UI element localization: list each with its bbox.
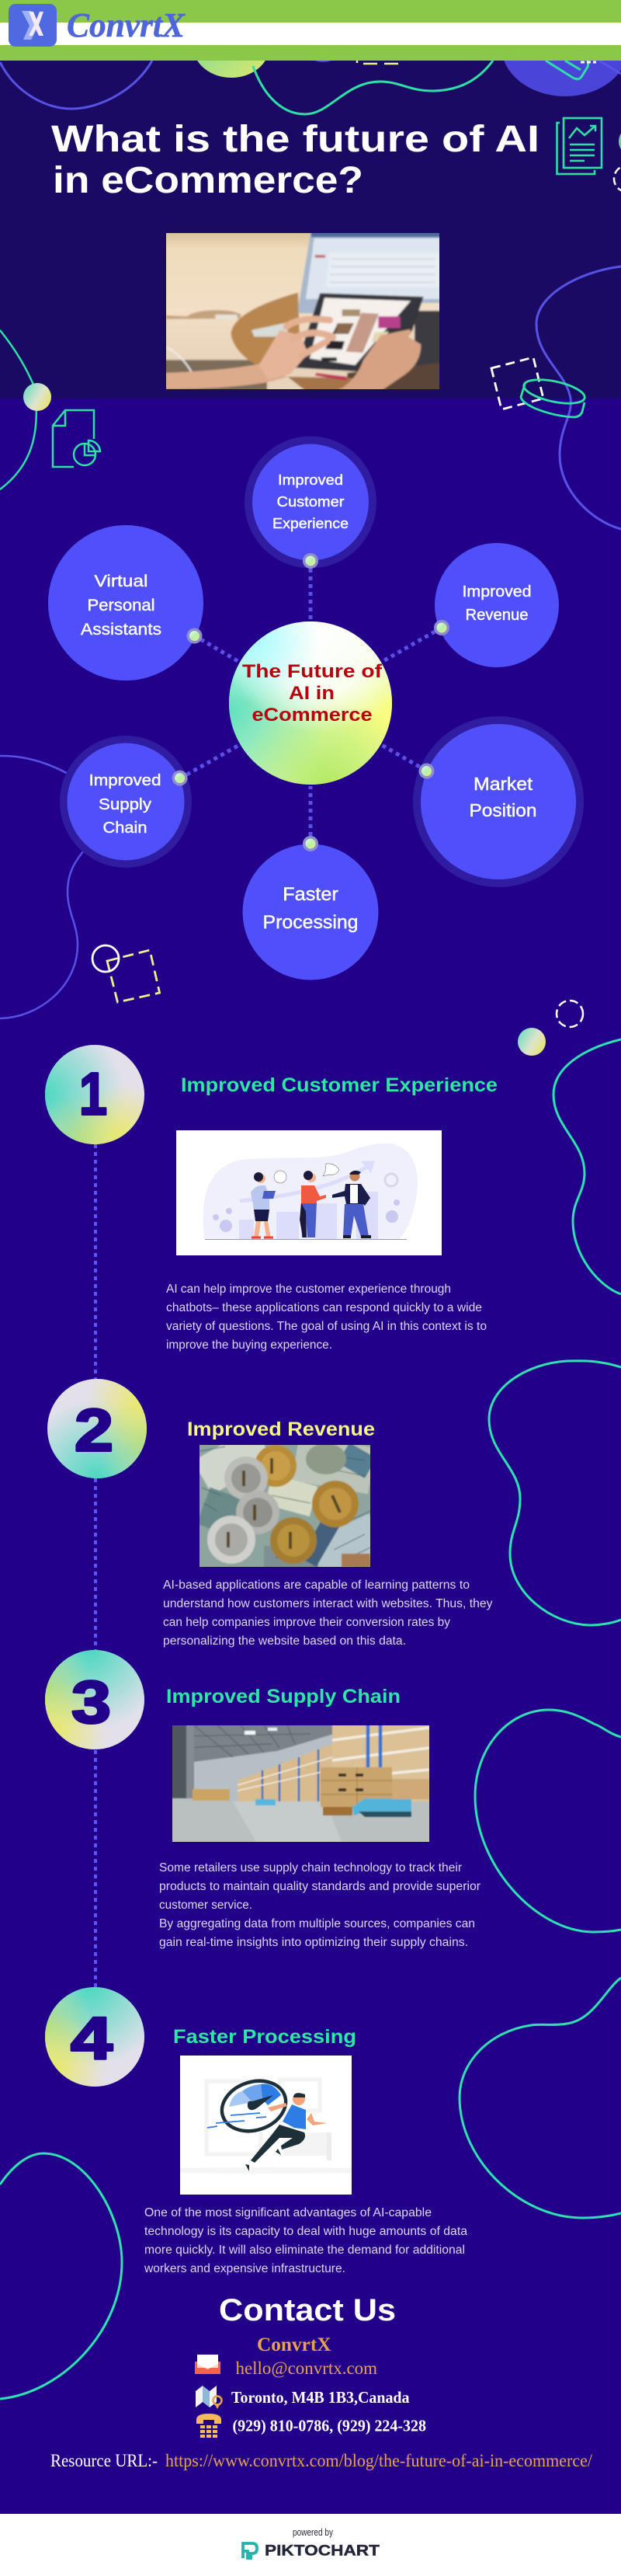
text: section 1: AI can help improve the customer experience through: [166, 1283, 451, 1296]
node: Virtual Personal Assistants: Assistants: [81, 621, 161, 639]
text: section 3: [159, 1861, 480, 1949]
phone numbers: (929) 810-0786, (929) 224-328: [233, 2416, 426, 2435]
text: section 4: One of the most significant advantages of AI-capable: [144, 2206, 432, 2219]
title: in eCommerce?: [53, 160, 363, 201]
icon: document with pie chart: [53, 410, 100, 467]
timeline dotted line: [94, 1144, 97, 1989]
number badge 2: 2: [75, 1397, 113, 1464]
email address: hello@convrtx.com: [236, 2358, 377, 2378]
number badge 4: [41, 1983, 148, 2090]
photo: coins on banknotes: [199, 1445, 370, 1567]
node: Improved Revenue: Revenue: [466, 607, 528, 624]
node: Virtual Personal Assistants: Virtual: [95, 573, 147, 590]
number badge 3: [41, 1646, 148, 1753]
text: section 4: more quickly. It will also eliminate the demand for additional: [144, 2244, 465, 2257]
mind map connectors: [180, 561, 442, 844]
text: section 2: understand how customers interact with websites. Thus, they: [163, 1597, 493, 1610]
node: Improved Customer Experience: Customer: [276, 493, 345, 510]
text: section 3: products to maintain quality standards and provide superior: [159, 1880, 480, 1893]
icon: circle and dashed square: [92, 945, 160, 1002]
heading: Improved Customer Experience: Improved Customer Experience: [181, 1074, 498, 1096]
illustration: runner with speedometer: [180, 2056, 352, 2195]
text: section 1: variety of questions. The goal of using AI in this context is to: [166, 1320, 487, 1333]
illustration: handshake and growth chart: [176, 1130, 442, 1255]
node: Faster Processing: Processing: [262, 912, 359, 933]
node: Improved Supply Chain: Improved: [88, 771, 161, 789]
node: Improved Supply Chain: Supply: [99, 795, 152, 813]
text: section 3: customer service.: [159, 1899, 252, 1912]
text: section 4: [144, 2206, 467, 2275]
node: Improved Customer Experience: Experience: [272, 515, 349, 531]
photo: automated warehouse: [172, 1725, 429, 1842]
icon: telephone: [196, 2414, 221, 2438]
heading: Contact Us: Contact Us: [219, 2293, 396, 2327]
powered by text: powered by: [293, 2527, 334, 2538]
text: section 2: personalizing the website based on this data.: [163, 1634, 406, 1648]
node: Faster Processing: Faster: [283, 884, 338, 905]
icon: map: [196, 2386, 222, 2409]
heading: Faster Processing: Faster Processing: [173, 2026, 356, 2048]
curve: right blue: [536, 266, 621, 529]
company name: ConvrtX: [257, 2334, 331, 2355]
icon: ConvrtX logo square: [9, 4, 57, 47]
node: Improved Customer Experience: Improved: [278, 472, 343, 488]
node: Improved Supply Chain: Chain: [102, 819, 147, 837]
text: section 4: workers and expensive infrastructure.: [144, 2262, 345, 2275]
text: section 3: Some retailers use supply chain technology to track their: [159, 1861, 462, 1875]
icon: email: [195, 2355, 220, 2374]
decoration: ball: [518, 1028, 546, 1056]
background: hero navy: [0, 0, 621, 399]
node: Improved Revenue: [435, 543, 559, 667]
icon: dashed circle: [557, 1001, 583, 1027]
wordmark: PIKTOCHART: [265, 2543, 380, 2559]
resource label: Resource URL:-: [50, 2451, 158, 2470]
icon: Piktochart P: [243, 2543, 257, 2558]
man in dark jacket: [332, 1171, 371, 1237]
node: Market Position: Position: [469, 800, 537, 820]
node: Faster Processing: [242, 844, 379, 980]
logo wordmark: ConvrtX: [67, 6, 186, 44]
node: Virtual Personal Assistants: [48, 525, 203, 681]
node: Improved Supply Chain: [60, 736, 192, 868]
node: Virtual Personal Assistants: Personal: [87, 597, 155, 614]
text: section 2: AI-based applications are capable of learning patterns to: [163, 1579, 470, 1592]
heading: Improved Revenue: Improved Revenue: [187, 1419, 375, 1440]
number badge 4: 4: [71, 2006, 113, 2073]
center node: The Future of AI in eCommerce: eCommerce: [252, 705, 373, 726]
resource link: https://www.convrtx.com/blog/the-future-of-ai-in-ecommerce/: [165, 2451, 593, 2470]
node: Market Position: Market: [474, 774, 533, 794]
curve: left green with ball: [0, 330, 51, 489]
center node: The Future of AI in eCommerce: [229, 621, 392, 785]
text: section 4: technology is its capacity to deal with huge amounts of data: [144, 2225, 467, 2238]
text: section 1: [166, 1283, 487, 1352]
heading: Improved Supply Chain: Improved Supply Chain: [166, 1686, 401, 1707]
center node: The Future of AI in eCommerce: The Future of: [242, 661, 383, 682]
hero decorations: top blobs and curves: [0, 0, 621, 192]
photo: hands on tablet: [166, 233, 439, 389]
curve: lower left blue: [0, 756, 87, 1018]
number badge 1: [45, 1045, 144, 1144]
text: section 1: chatbots– these applications can respond quickly to a wide: [166, 1301, 482, 1314]
icon: dashed square and disc: [491, 357, 587, 417]
text: section 2: can help companies improve their conversion rates by: [163, 1616, 450, 1629]
text: section 3: By aggregating data from multiple sources, companies can: [159, 1917, 475, 1930]
icon: report document: [557, 118, 602, 174]
text: section 2: [163, 1579, 493, 1648]
node: Improved Revenue: Improved: [463, 583, 531, 600]
header banner: [0, 0, 621, 61]
curves: right and left green outlines: [0, 1039, 621, 2399]
text: section 3: gain real-time insights into optimizing their supply chains.: [159, 1936, 468, 1949]
number badge 2: [47, 1379, 147, 1478]
address: Toronto, M4B 1B3,Canada: [231, 2388, 410, 2407]
connector end dots: [172, 553, 449, 851]
title: [51, 119, 539, 201]
woman with clipboard: [251, 1172, 276, 1238]
node: Improved Customer Experience: [245, 437, 376, 569]
title: What is the future of AI: [51, 119, 539, 160]
number badge 3: 3: [71, 1669, 111, 1735]
footer: Piktochart: [0, 2514, 621, 2576]
number badge 1: 1: [79, 1061, 107, 1128]
text: section 1: improve the buying experience.: [166, 1338, 332, 1352]
center node: The Future of AI in eCommerce: AI in: [289, 683, 335, 704]
woman in red: [300, 1171, 326, 1238]
node: Market Position: [413, 716, 584, 887]
